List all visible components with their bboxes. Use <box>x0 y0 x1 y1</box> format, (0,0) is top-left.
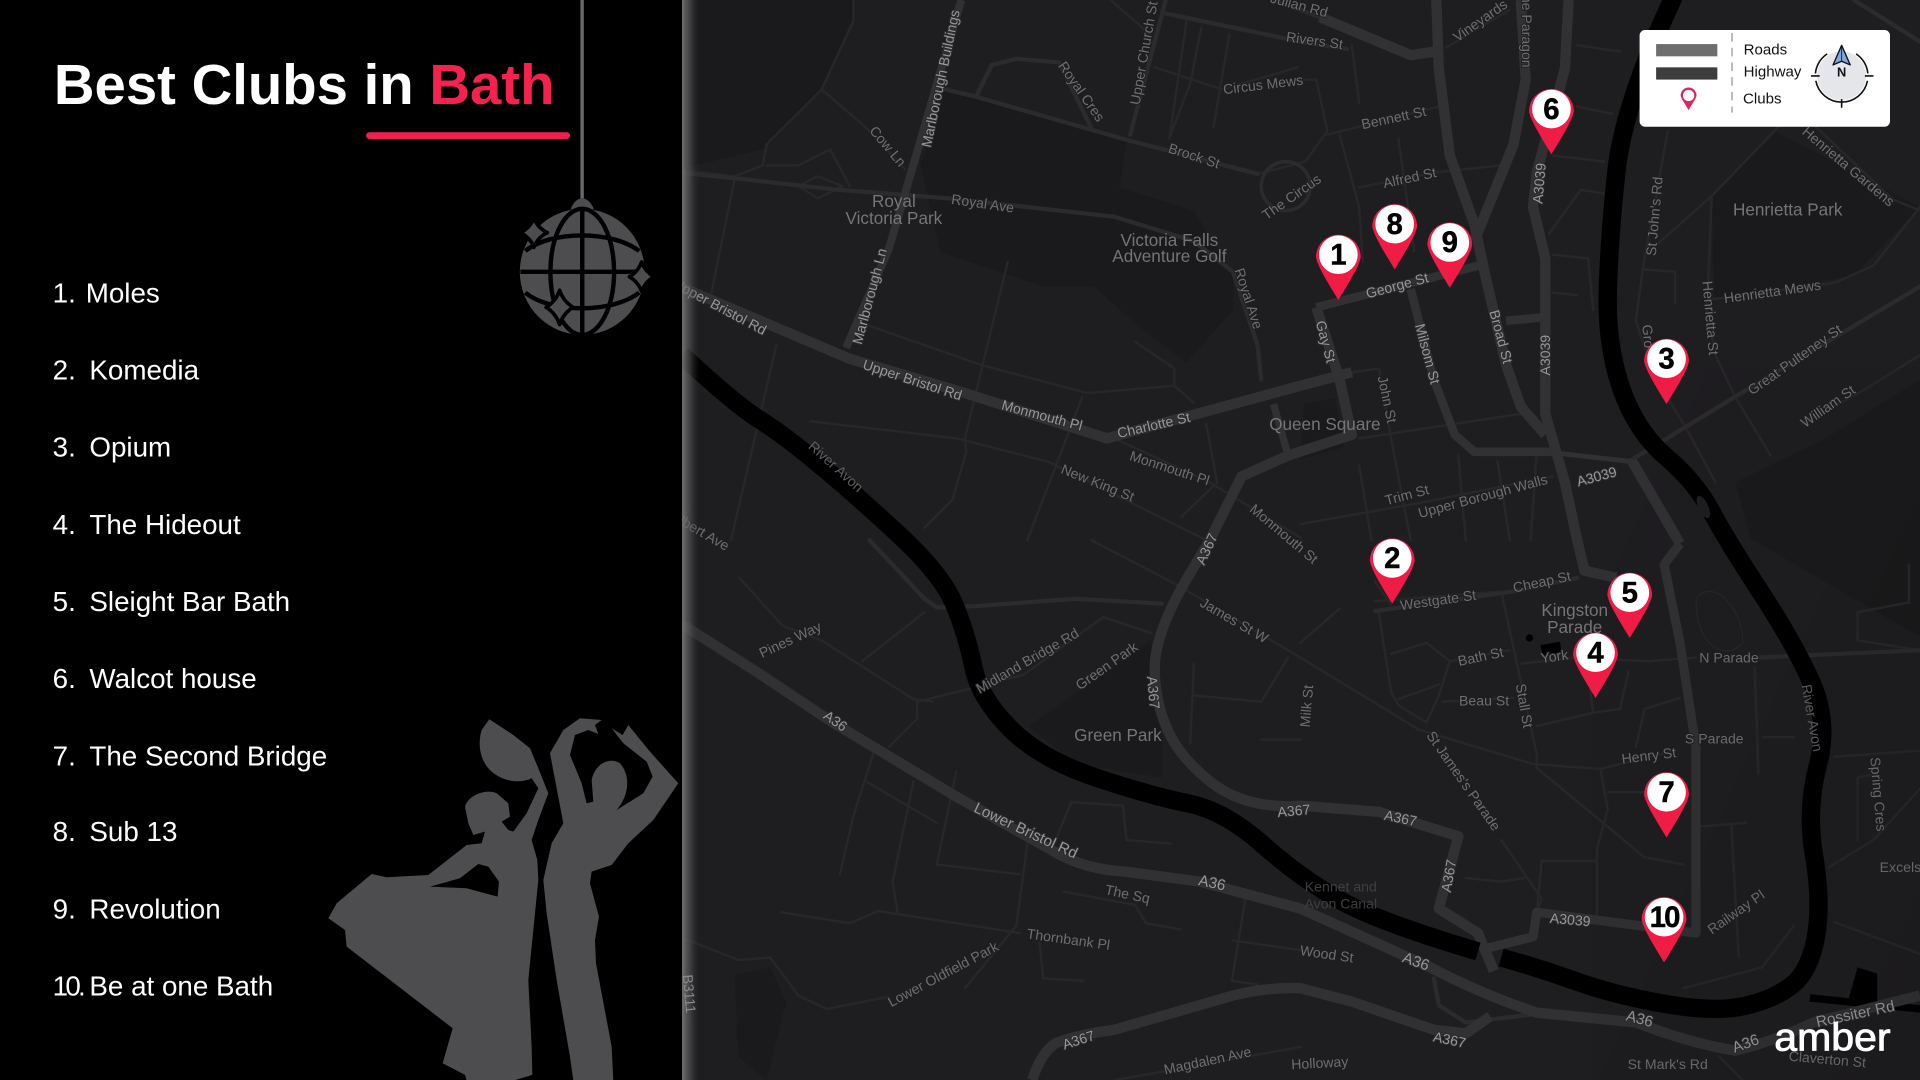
road labels: Avon Canal <box>1305 896 1377 912</box>
pin 8 <box>1372 204 1417 269</box>
list item 8: Sub 13 <box>89 816 177 847</box>
road labels: Milk St <box>1297 684 1316 728</box>
road labels: Green Park <box>1074 725 1162 745</box>
road labels: A36 <box>1197 872 1227 894</box>
road labels: Parade <box>1547 617 1602 637</box>
road labels: Excels <box>1880 859 1920 875</box>
road labels: Henrietta St <box>1699 280 1722 356</box>
road labels: Circus Mews <box>1222 72 1304 97</box>
pin 9 <box>1427 222 1472 288</box>
list item 10: 10. <box>53 971 86 1002</box>
road labels: Royal Ave <box>950 191 1015 216</box>
pin 4 <box>1573 633 1618 698</box>
road labels: A3039 <box>1549 910 1591 929</box>
road labels: St James's Parade <box>1423 728 1504 834</box>
road labels: Rossiter Rd <box>1815 998 1896 1031</box>
road labels: A36 <box>1624 1008 1655 1031</box>
list item 7: The Second Bridge <box>89 740 327 771</box>
road labels: Beau St <box>1459 692 1509 708</box>
road labels: Trim St <box>1383 481 1431 508</box>
road labels: Henrietta Gardens <box>1799 123 1898 209</box>
road labels: Bath St <box>1456 644 1505 669</box>
list item 2: 2. <box>53 355 76 386</box>
pin 10: 10 <box>1650 901 1680 934</box>
pin 5 <box>1607 573 1652 638</box>
road labels: River Avon <box>1799 683 1826 753</box>
list item 4: The Hideout <box>89 509 241 540</box>
pin 9: 9 <box>1442 226 1458 259</box>
pin 2: 2 <box>1384 542 1400 575</box>
road labels: Claverton St <box>1788 1048 1867 1070</box>
legend label: roads: Roads <box>1744 41 1787 58</box>
road labels: The Sq <box>1104 881 1151 906</box>
road labels: Rivers St <box>1285 28 1344 52</box>
road labels: Royal Ave <box>1231 266 1266 331</box>
road labels: River Avon <box>805 438 867 495</box>
list item 5: 5. <box>53 586 76 617</box>
road labels: Marlborough Ln <box>849 247 890 346</box>
road labels: Wood St <box>1299 942 1355 965</box>
list item 3: Opium <box>89 432 171 463</box>
map pins <box>1316 89 1689 962</box>
panel: map <box>669 0 1920 1080</box>
road labels: Westgate St <box>1399 587 1477 613</box>
pin 6: 6 <box>1543 93 1560 126</box>
road labels: Monmouth Pl <box>1000 397 1084 434</box>
road labels: Henry St <box>1621 744 1677 767</box>
road labels: Brock St <box>1166 140 1222 172</box>
road labels: Pines Way <box>756 618 825 661</box>
road labels: James St W <box>1197 594 1272 646</box>
road labels: Railway Pl <box>1704 886 1767 937</box>
list of clubs <box>53 277 327 1002</box>
road labels: A367 <box>1192 530 1221 567</box>
road labels: Midland Bridge Rd <box>973 625 1081 696</box>
road labels: Henrietta Park <box>1733 200 1843 220</box>
road labels: A3039 <box>1575 463 1619 489</box>
road labels <box>669 0 1920 1077</box>
pin 6 <box>1529 89 1574 154</box>
road labels: Queen Square <box>1269 414 1381 434</box>
legend divider <box>1731 33 1733 113</box>
road labels: Royal <box>872 191 916 211</box>
road labels: Cow Ln <box>866 123 909 170</box>
highway A36 <box>682 624 1920 1080</box>
road labels: Upper Borough Walls <box>1416 471 1549 521</box>
road labels: Adventure Golf <box>1112 246 1227 266</box>
list item 4: 4. <box>53 509 76 540</box>
road labels: Royal Cres <box>1055 58 1108 125</box>
road labels: Thornbank Pl <box>1026 925 1111 953</box>
title underline <box>366 132 570 139</box>
road labels: Monmouth St <box>1247 501 1321 567</box>
road labels: Upper Bristol Rd <box>671 275 769 338</box>
legend swatch: roads <box>1656 44 1717 56</box>
icon: disco ball <box>520 0 654 336</box>
road labels: Kennet and <box>1305 878 1377 894</box>
road labels: A367 <box>1144 676 1163 710</box>
road labels: Alfred St <box>1381 164 1438 191</box>
road labels: Albert Ave <box>669 508 732 554</box>
dancer: woman with fan <box>328 719 548 1080</box>
list item 6: Walcot house <box>89 663 257 694</box>
road labels: Gay St <box>1313 319 1339 364</box>
icon: compass <box>1811 45 1873 108</box>
road labels: St John's Rd <box>1643 176 1666 257</box>
road labels: George St <box>1364 269 1430 301</box>
river avon <box>682 0 1920 1009</box>
ponds <box>1526 494 1877 1002</box>
road labels: The Circus <box>1259 171 1324 223</box>
list item 3: 3. <box>53 432 76 463</box>
road labels: Upper Church St <box>1127 0 1161 106</box>
pin 1 <box>1316 235 1361 300</box>
legend label: highway: Highway <box>1744 64 1802 81</box>
dancer: man with raised arms <box>543 718 678 1080</box>
road labels: A36 <box>1400 949 1432 975</box>
road labels: New King St <box>1059 461 1137 505</box>
road labels: Green Park <box>1072 638 1141 693</box>
road labels: Monmouth Pl <box>1128 447 1212 488</box>
panel: legend <box>1640 30 1890 127</box>
road labels: Marlborough Buildings <box>918 8 963 149</box>
list item 9: Revolution <box>89 893 221 924</box>
pin 1: 1 <box>1330 238 1347 271</box>
list item 2: Komedia <box>89 355 200 386</box>
road labels: Broad St <box>1486 308 1516 365</box>
road labels: Spring Cres <box>1867 757 1890 832</box>
road labels: York <box>1540 646 1570 666</box>
road labels: A367 <box>1383 807 1419 829</box>
list item 8: 8. <box>53 816 76 847</box>
road labels: N Parade <box>1699 649 1759 665</box>
legend icon: clubs pin <box>1681 88 1697 110</box>
pin 3 <box>1644 339 1689 404</box>
road labels: Great Pulteney St <box>1745 321 1845 398</box>
list item 6: 6. <box>53 663 76 694</box>
road labels: Holloway <box>1291 1053 1350 1072</box>
road labels: Victoria Falls <box>1121 230 1218 250</box>
pin 3: 3 <box>1658 343 1675 376</box>
pin 4: 4 <box>1587 636 1604 669</box>
road labels: Charlotte St <box>1116 409 1192 441</box>
legend label: clubs: Clubs <box>1743 90 1782 107</box>
road labels: Kingston <box>1541 600 1608 620</box>
pin 7: 7 <box>1658 776 1675 809</box>
list item 5: Sleight Bar Bath <box>89 586 290 617</box>
panel: left sidebar <box>0 0 700 1080</box>
icon: dancers silhouette <box>328 718 678 1080</box>
pin 2 <box>1370 538 1415 604</box>
list item 1: 1. <box>53 277 76 308</box>
road labels: A367 <box>1060 1027 1097 1052</box>
road labels: Gro <box>1639 324 1657 349</box>
road labels: A36 <box>1730 1031 1762 1057</box>
logo: amber: amber <box>1774 1017 1891 1060</box>
list item 10: Be at one Bath <box>89 971 273 1002</box>
pin 5: 5 <box>1622 576 1638 609</box>
road labels: Milsom St <box>1412 322 1443 386</box>
road labels: A36 <box>821 707 851 735</box>
major roads <box>680 0 1696 971</box>
title: Best Clubs in Bath <box>54 53 554 116</box>
road labels: A3039 <box>1537 335 1553 375</box>
road labels: Stall St <box>1513 682 1536 729</box>
road labels: A367 <box>1438 858 1459 893</box>
pin 8: 8 <box>1387 208 1403 241</box>
road labels: Magdalen Ave <box>1162 1043 1253 1077</box>
list item 9: 9. <box>53 893 76 924</box>
minor roads <box>680 0 1920 1080</box>
pin 7 <box>1644 772 1689 838</box>
map edge label: B3111 <box>680 974 699 1014</box>
road labels: A367 <box>1277 801 1311 820</box>
list item 1: Moles <box>86 277 160 308</box>
list item 3 <box>53 432 171 463</box>
road labels: Victoria Park <box>845 208 943 228</box>
road labels: A3039 <box>1529 162 1549 204</box>
road labels: Lower Oldfield Park <box>885 938 1002 1010</box>
road labels: Bennett St <box>1360 103 1428 132</box>
road labels: Henrietta Mews <box>1723 277 1822 306</box>
road labels: Upper Bristol Rd <box>861 356 964 403</box>
pin 10 <box>1642 897 1686 962</box>
road labels: John St <box>1375 374 1400 424</box>
road labels: Lower Bristol Rd <box>971 800 1080 862</box>
road labels: S Parade <box>1685 730 1744 746</box>
road labels: William St <box>1798 382 1858 431</box>
road labels: Cheap St <box>1511 568 1572 596</box>
medium roads <box>680 0 1920 1022</box>
icon: compass: N <box>1837 65 1846 80</box>
legend swatch: highway <box>1656 67 1717 80</box>
parks: darker green areas <box>680 0 1920 1080</box>
list item 1 <box>53 277 160 308</box>
road labels: A367 <box>1432 1028 1468 1051</box>
list item 7: 7. <box>53 740 76 771</box>
road labels: St Mark's Rd <box>1628 1056 1708 1072</box>
